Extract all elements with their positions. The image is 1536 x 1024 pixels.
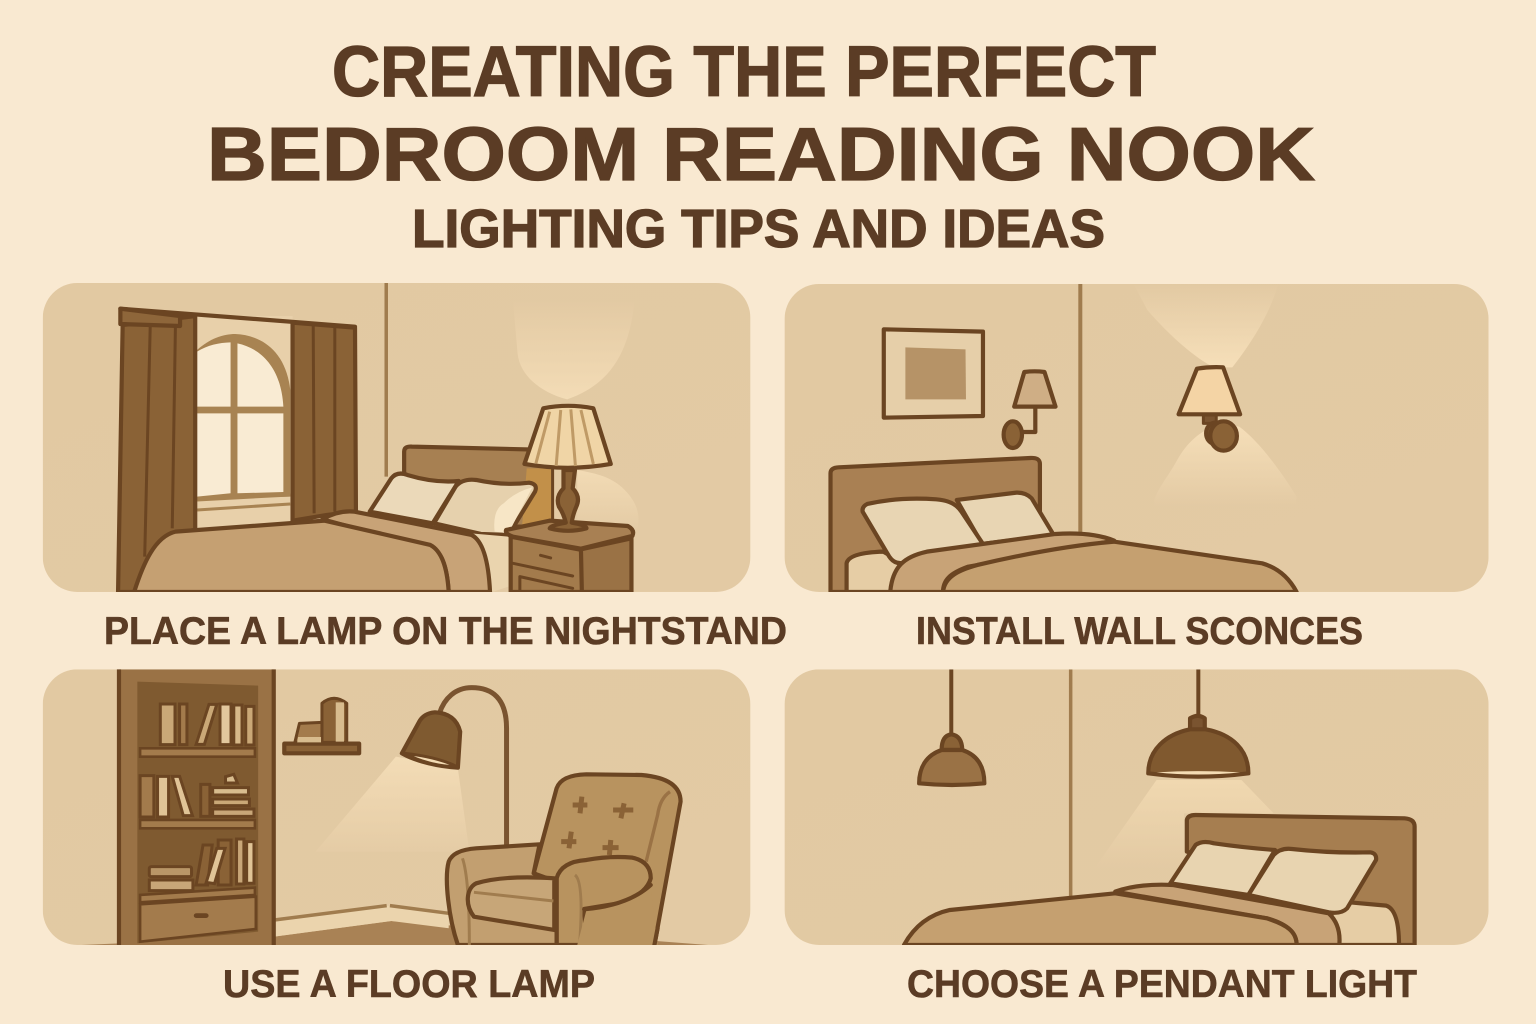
- right curtain: [293, 323, 356, 521]
- pendant light cone: [1132, 780, 1273, 818]
- small sconce: [1004, 371, 1056, 448]
- floor lamp: [402, 688, 507, 847]
- title line 1: CREATING THE PERFECT: [332, 33, 1156, 112]
- lamp glow: [513, 300, 639, 540]
- title line 2: BEDROOM READING NOOK: [207, 112, 1315, 196]
- table lamp: [524, 406, 611, 531]
- headboard: [1187, 815, 1415, 945]
- folded blanket: [1115, 885, 1340, 945]
- headboard: [831, 458, 1040, 592]
- sconce glow: [1152, 315, 1282, 476]
- left curtain: [118, 309, 195, 592]
- pillows: [370, 474, 536, 535]
- caption: pendant light: CHOOSE A PENDANT LIGHT: [907, 963, 1417, 1006]
- mattress: [847, 552, 904, 592]
- left pendant: [919, 669, 984, 785]
- panel: wall sconces: [785, 284, 1489, 592]
- folded blanket: [322, 511, 490, 592]
- pillows: [863, 493, 1054, 563]
- subtitle: LIGHTING TIPS AND IDEAS: [412, 199, 1105, 259]
- framed picture: [884, 329, 983, 418]
- pillows: [1170, 842, 1376, 913]
- panel: floor lamp: [43, 669, 750, 946]
- books: [140, 704, 254, 891]
- lamp light cone: [346, 756, 464, 818]
- panel: pendant light: [785, 669, 1489, 945]
- right pendant: [1148, 669, 1248, 777]
- nightstand: [506, 521, 633, 592]
- curtain rod: [120, 309, 355, 327]
- panel: nightstand lamp: [43, 283, 750, 592]
- large sconce: [1179, 367, 1240, 451]
- baseboard: [274, 906, 449, 937]
- folded blanket: [890, 533, 1114, 592]
- mattress side: [473, 534, 508, 592]
- window: [197, 334, 290, 512]
- floor: [81, 921, 708, 945]
- caption: floor lamp: USE A FLOOR LAMP: [223, 963, 595, 1006]
- bedspread: [943, 542, 1297, 592]
- wall corner: [1069, 669, 1072, 897]
- mattress: [1331, 902, 1399, 945]
- bedspread: [904, 893, 1297, 945]
- wall corner: [1078, 284, 1082, 537]
- headboard: [404, 447, 552, 527]
- title: [207, 33, 1315, 259]
- caption: wall sconces: INSTALL WALL SCONCES: [916, 610, 1363, 653]
- wall shelf: [284, 698, 359, 753]
- caption: nightstand lamp: PLACE A LAMP ON THE NIGHTSTAND: [104, 610, 787, 653]
- bedspread: [134, 521, 449, 592]
- armchair: [447, 774, 681, 945]
- bookcase: [119, 669, 274, 946]
- wall corner: [384, 283, 388, 477]
